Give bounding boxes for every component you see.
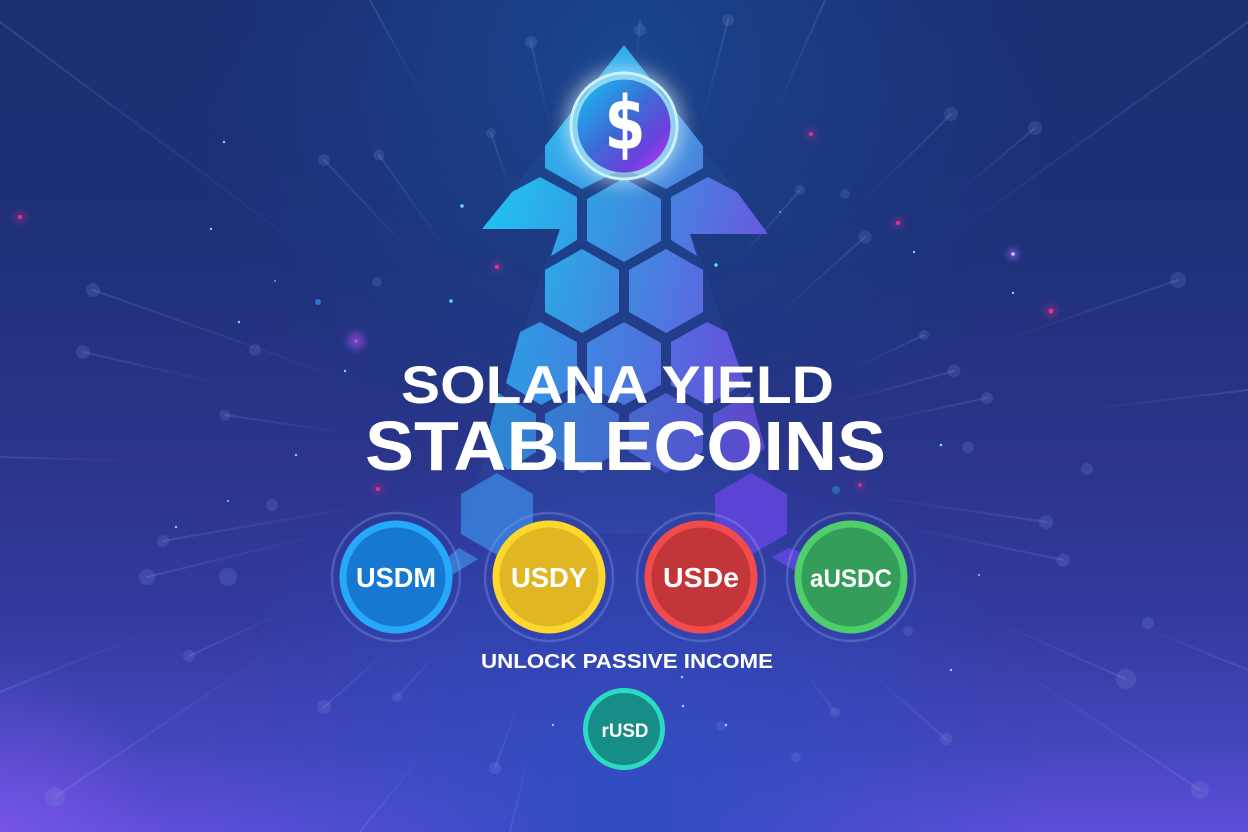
coin: aUSDC: aUSDC — [810, 565, 892, 593]
title line 2: STABLECOINS — [365, 407, 886, 485]
arrow graphic made of hexagons — [448, 45, 800, 575]
hexagon row: three cells — [506, 322, 745, 405]
coin: USDe — [637, 513, 765, 641]
coin: aUSDC — [787, 513, 915, 641]
lower right hexagon — [715, 473, 787, 555]
title line 1: SOLANA YIELD — [401, 356, 834, 415]
hexagon row: pair — [545, 249, 703, 333]
left arrow shard — [448, 548, 478, 575]
dollar sign: $ — [604, 81, 646, 167]
coin: rUSD — [586, 690, 662, 768]
coin: rUSD: rUSD — [602, 721, 648, 742]
arrow tip cell — [545, 45, 703, 189]
arrow backing silhouette — [461, 45, 787, 534]
sparkle particles — [13, 128, 1058, 726]
coin: USDe: USDe — [663, 562, 739, 593]
left wing — [482, 177, 577, 256]
right wing — [671, 177, 768, 256]
title — [365, 356, 886, 485]
dollar coin — [566, 68, 682, 184]
coin: USDM: USDM — [356, 562, 436, 593]
right arrow shard — [772, 548, 800, 572]
subtitle: UNLOCK PASSIVE INCOME — [481, 651, 773, 673]
hexagon row: faded cells — [485, 393, 765, 473]
coin: USDY: USDY — [511, 562, 587, 593]
coin: USDM — [332, 513, 460, 641]
lower left hexagon — [461, 473, 533, 555]
hexagon row: centre — [587, 178, 661, 262]
coin: USDY — [485, 513, 613, 641]
